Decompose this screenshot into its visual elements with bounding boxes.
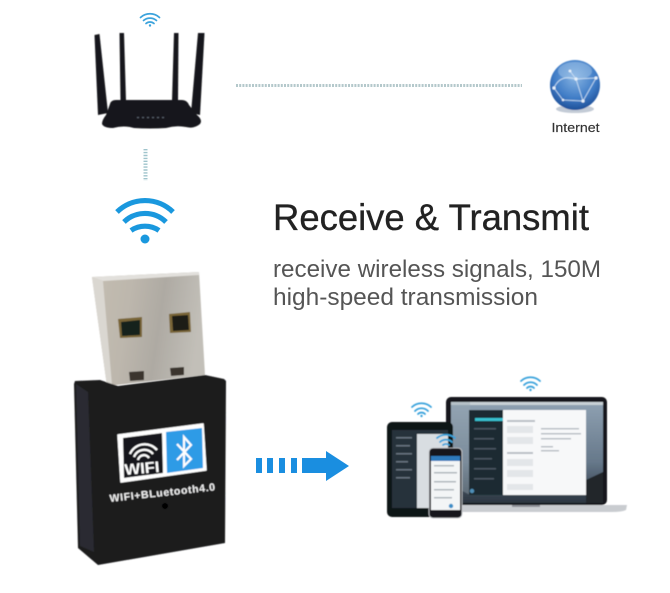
laptop: [446, 397, 627, 512]
WIFI text: WIFI: [124, 459, 160, 479]
connector: router to internet dotted line: [236, 84, 522, 87]
label: Internet: Internet: [552, 121, 600, 135]
phone: [429, 448, 462, 518]
title: Receive & Transmit: [273, 197, 590, 238]
text block: description: receive wireless signals, 150M: [273, 256, 601, 283]
connector: router to adapter dotted line: [144, 149, 148, 181]
product label text: WIFI+BLuetooth4.0: [109, 481, 216, 505]
icon: internet globe: [550, 60, 600, 113]
icon: bluetooth glyph: [177, 437, 191, 466]
LED dot: [162, 503, 168, 509]
devices group: [387, 377, 627, 518]
tablet: [387, 422, 453, 517]
icon: large wifi: [117, 201, 173, 244]
USB wifi adapter: [74, 272, 226, 565]
text block: description: [273, 256, 601, 311]
icon: wifi above laptop: [521, 377, 540, 391]
arrow: [256, 451, 349, 481]
icon: wifi above phone: [437, 435, 455, 445]
USB metal plug: [92, 272, 205, 386]
icon: small wifi above router: [140, 14, 160, 27]
app window: [469, 410, 586, 495]
adapter black body: [74, 375, 226, 565]
logo badge: [118, 424, 206, 482]
icon: router: [94, 33, 204, 128]
icon: wifi glyph: [130, 444, 157, 460]
icon: wifi above tablet: [412, 403, 431, 417]
text block: description: high-speed transmission: [273, 284, 538, 311]
